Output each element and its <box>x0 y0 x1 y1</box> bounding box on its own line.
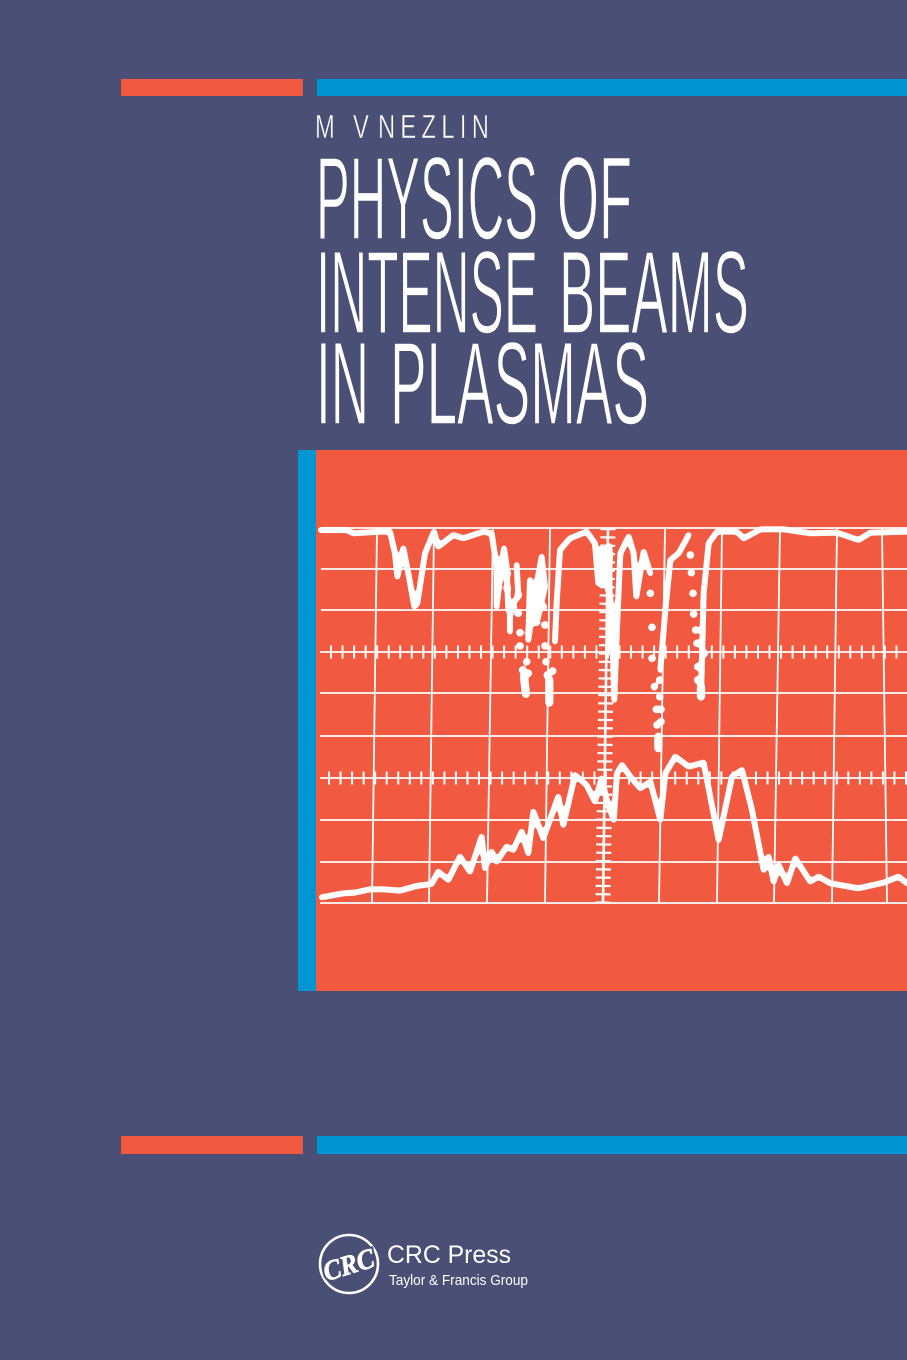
title <box>316 133 749 450</box>
publisher group: Taylor & Francis Group <box>389 1273 528 1289</box>
icon: CRC roundel: CRC <box>319 1243 379 1288</box>
lower trace <box>322 757 907 897</box>
title line 2: INTENSE <box>316 227 538 359</box>
oscilloscope grid <box>320 528 907 903</box>
panel: oscilloscope image <box>298 450 907 991</box>
title line 1: PHYSICS <box>316 133 538 265</box>
icon: CRC roundel: CRC <box>319 1243 379 1288</box>
author: NEZLIN <box>378 109 489 146</box>
title line 3 <box>316 318 649 450</box>
title line 1 <box>316 133 632 265</box>
publisher logo <box>319 1235 528 1293</box>
panel blue edge <box>298 450 316 991</box>
title: OF <box>557 133 632 265</box>
publisher name: CRC Press <box>387 1241 511 1269</box>
author <box>315 109 489 146</box>
upper trace <box>321 529 907 748</box>
author: V <box>353 109 370 146</box>
panel red background <box>316 450 907 991</box>
author: M <box>315 109 335 146</box>
top accent bars <box>121 79 907 96</box>
bottom accent bars <box>121 1136 907 1154</box>
title line 3: IN <box>316 318 369 450</box>
